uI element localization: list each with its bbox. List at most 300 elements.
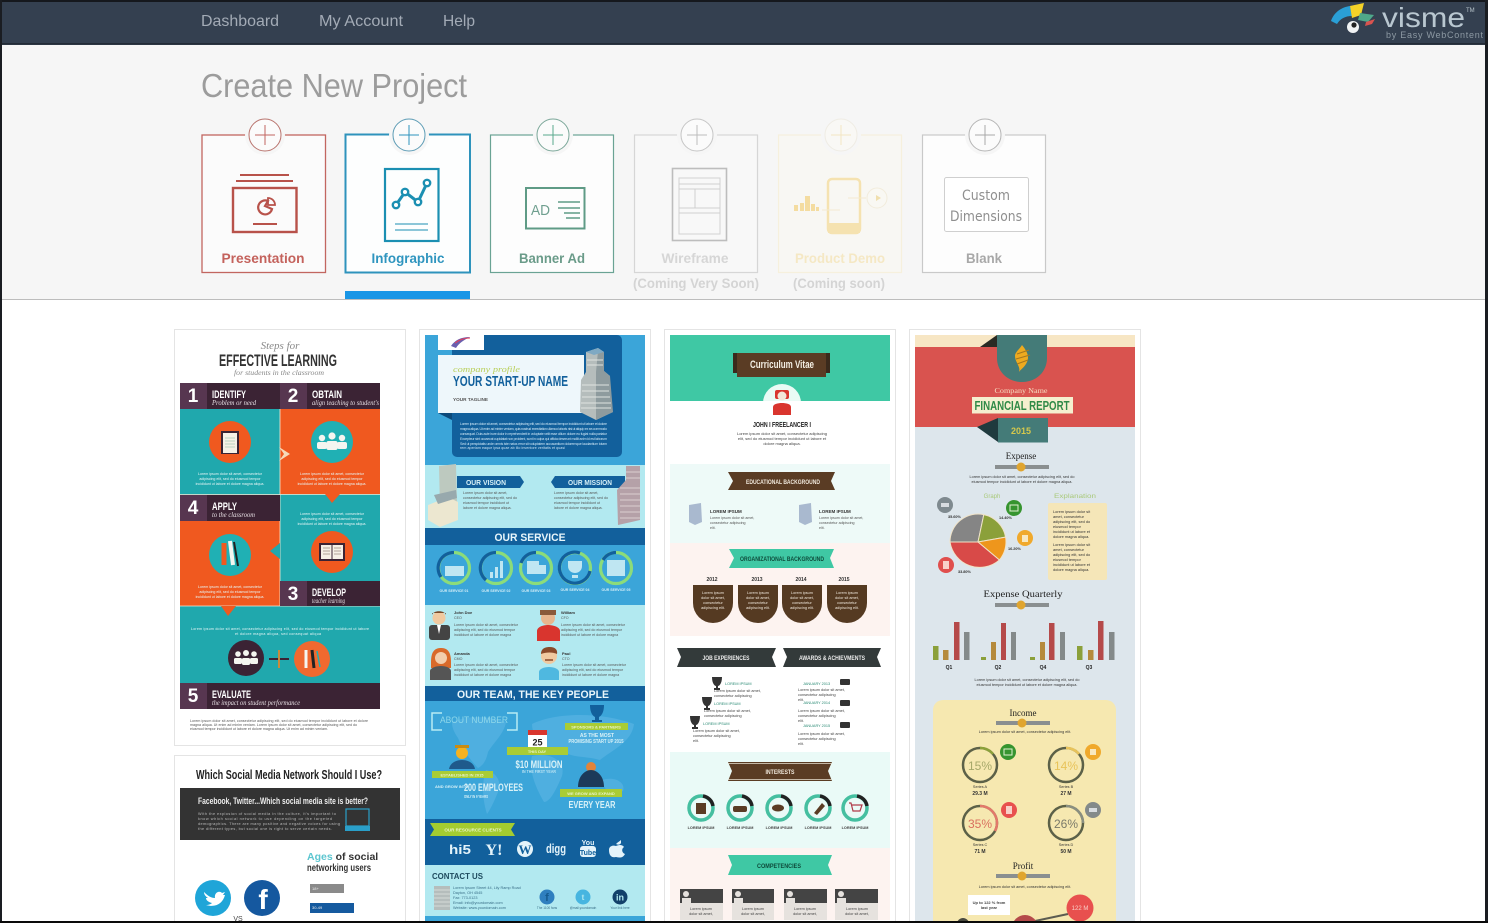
organizational background section: consectetur bbox=[792, 601, 813, 605]
income panel: 29.3 M bbox=[972, 791, 988, 797]
interests section: LOREM IPSUM bbox=[727, 826, 753, 830]
competencies section bbox=[670, 848, 890, 920]
step 3: develop: 3 bbox=[288, 584, 298, 605]
organizational background section: Lorem ipsum bbox=[836, 591, 858, 595]
step 5: evaluate: et dolore magna aliqua, sed consequat aliqua bbox=[235, 632, 321, 636]
vs label: VS bbox=[233, 916, 243, 923]
organizational background section: consectetur bbox=[837, 601, 858, 605]
ages of social networking users bbox=[307, 851, 378, 913]
step 5: evaluate: Lorem ipsum dolor sit amet, consectetur adipiscing elit, sed do eiusmod tempor incididunt ut labore bbox=[191, 627, 369, 631]
awards and achievements: elit. bbox=[798, 698, 804, 702]
expense quarterly bar chart: Expense Quarterly bbox=[984, 589, 1063, 599]
job experiences bbox=[677, 648, 776, 743]
job experiences: consectetur adipiscing bbox=[704, 714, 742, 718]
footer note: eiusmod tempor incididunt ut labore et dolore magna aliqua. Ut enim ad minim veniam. bbox=[190, 727, 328, 731]
social media intro banner: Facebook, Twitter...Which social media site is better? bbox=[198, 796, 368, 807]
intro text block: Sed ut perspiciatis unde omnis iste natus error sit voluptatem accusantium doloremque laudantium totam bbox=[460, 442, 607, 446]
explanation panel: dolore magna aliqua. bbox=[1053, 534, 1089, 539]
explanation panel: Lorem ipsum dolor sit bbox=[1053, 542, 1091, 547]
report header: Company Name bbox=[994, 387, 1048, 395]
interests section: LOREM IPSUM bbox=[688, 826, 714, 830]
stat: sponsors: PROMISING START UP 2015 bbox=[568, 739, 624, 745]
explanation panel: amet, consectetur bbox=[1053, 547, 1085, 552]
about number label bbox=[432, 713, 517, 730]
partner logos section: Y! bbox=[486, 842, 502, 859]
job experiences: LOREM IPSUM bbox=[714, 702, 741, 706]
person: John Doe: adipiscing elit, sed do eiusmod tempor bbox=[454, 628, 516, 632]
logo: visme bbox=[1331, 2, 1483, 40]
person: Paul: adipiscing elit, sed do eiusmod tempor bbox=[562, 668, 624, 672]
project type: Wireframe: (Coming Very Soon) bbox=[633, 275, 759, 291]
stat: ten million: IN THE FIRST YEAR bbox=[522, 769, 557, 774]
ages of social networking users: 18+ bbox=[312, 886, 319, 891]
income panel: Series D bbox=[1059, 843, 1074, 847]
our vision ribbon: labore et dolore magna aliqua. bbox=[463, 506, 512, 510]
stat: ten million bbox=[507, 730, 568, 774]
income rings bbox=[963, 748, 1083, 840]
stat: ten million: $10 MILLION bbox=[516, 759, 563, 771]
our mission ribbon: consectetur adipiscing elit, sed do bbox=[554, 496, 608, 500]
step 3: develop bbox=[280, 512, 380, 606]
stat: sponsors: SPONSORS & PARTNERS bbox=[571, 724, 621, 730]
educational background section: consectetur adipiscing bbox=[819, 521, 855, 525]
competencies section: dolor sit amet, bbox=[793, 912, 817, 916]
explanation panel: incididunt ut labore et bbox=[1053, 562, 1091, 567]
awards and achievements: JANUARY 2015 bbox=[803, 724, 830, 728]
step 4: apply: 4 bbox=[188, 498, 199, 519]
awards and achievements: consectetur adipiscing bbox=[798, 693, 836, 697]
income panel: 27 M bbox=[1060, 791, 1072, 797]
step 1: identify: IDENTIFY bbox=[212, 389, 246, 401]
step 2: obtain: incididunt ut labore et dolore magna aliqua. bbox=[298, 482, 366, 486]
interests section bbox=[670, 752, 890, 848]
income panel: 26% bbox=[1054, 817, 1078, 831]
organizational background section: Lorem ipsum bbox=[747, 591, 769, 595]
our vision ribbon: OUR VISION bbox=[466, 480, 506, 487]
organizational background section bbox=[670, 543, 890, 636]
custom dimensions box bbox=[944, 178, 1028, 232]
job experiences: JOB EXPERIENCES bbox=[702, 655, 750, 662]
job experiences: LOREM IPSUM bbox=[703, 722, 730, 726]
explanation panel: amet, consectetur bbox=[1053, 514, 1085, 519]
report header bbox=[915, 335, 1135, 442]
job experiences: Lorem ipsum dolor sit amet, bbox=[693, 729, 740, 733]
person: Amanda: incididunt ut labore et dolore magna bbox=[454, 673, 511, 677]
educational background section: Lorem ipsum dolor sit amet, bbox=[710, 516, 754, 520]
icon: ad banner bbox=[526, 188, 584, 228]
template card: Effective Learning bbox=[174, 330, 406, 746]
step 2: obtain: adipiscing elit, sed do eiusmod tempor bbox=[301, 477, 363, 481]
intro text block: rem aperiam eaque ipsa quae ab illo inventore veritatis et quasi bbox=[460, 446, 565, 450]
team members bbox=[425, 605, 645, 683]
expense quarterly bar chart: Lorem ipsum dolor sit amet, consectetur adipiscing elit, sed do bbox=[975, 678, 1079, 682]
step 3: develop: incididunt ut labore et dolore magna aliqua. bbox=[298, 522, 366, 526]
stat: 200 employees: AND GROW INTO bbox=[435, 784, 468, 789]
curriculum vitae ribbon: Curriculum Vitae bbox=[750, 359, 814, 371]
step 1: identify: Lorem ipsum dolor sit amet, consectetur bbox=[198, 472, 263, 476]
person: John Doe bbox=[429, 610, 519, 640]
competencies section: Lorem ipsum bbox=[794, 907, 816, 911]
income panel: 71 M bbox=[974, 849, 986, 855]
explanation panel: adipiscing elit, sed do bbox=[1053, 519, 1090, 524]
project type: Product Demo bbox=[778, 115, 902, 291]
competencies section: Lorem ipsum bbox=[690, 907, 712, 911]
explanation panel bbox=[1048, 494, 1107, 580]
template card: Company Profile bbox=[420, 330, 650, 923]
project type: Product Demo: (Coming soon) bbox=[793, 275, 885, 291]
expense pie chart: 35.60% bbox=[948, 515, 962, 519]
person: William: adipiscing elit, sed do eiusmod tempor bbox=[561, 628, 623, 632]
contact us section: Dayton, OH 4545 bbox=[453, 891, 482, 895]
contact us section: Website: www.yourdomain.com bbox=[453, 906, 506, 910]
job experiences: consectetur adipiscing bbox=[693, 734, 731, 738]
awards and achievements: Lorem ipsum dolor sit amet, bbox=[798, 709, 845, 713]
partner logos section: Tube bbox=[580, 850, 596, 857]
income panel: 50 M bbox=[1060, 849, 1072, 855]
organizational background section: dolor sit amet, bbox=[701, 596, 725, 600]
interests section: LOREM IPSUM bbox=[805, 826, 831, 830]
freelancer profile bbox=[737, 384, 827, 446]
explanation panel: eiusmod tempor bbox=[1053, 524, 1082, 529]
expense quarterly bar chart bbox=[933, 589, 1114, 687]
nav link: Dashboard: Dashboard bbox=[201, 13, 279, 30]
icon: facebook: f bbox=[258, 884, 268, 915]
our resource clients ribbon bbox=[430, 823, 515, 836]
person: William: CFO bbox=[561, 616, 569, 620]
profit callout: last year bbox=[981, 905, 998, 910]
competencies section: Lorem ipsum bbox=[846, 907, 868, 911]
partner logos section: You bbox=[582, 840, 594, 847]
interests section: LOREM IPSUM bbox=[766, 826, 792, 830]
illustration: world map bbox=[452, 715, 634, 814]
nav link: My Account: My Account bbox=[319, 13, 404, 30]
logo: visme: visme bbox=[1382, 2, 1465, 33]
person: John Doe: incididunt ut labore et dolore magna bbox=[454, 633, 511, 637]
our resource clients ribbon: OUR RESOURCE CLIENTS bbox=[444, 828, 502, 832]
explanation panel: incididunt ut labore et bbox=[1053, 529, 1091, 534]
contact us section: @mail.yourdomain bbox=[570, 906, 597, 910]
title block: YOUR TAGLINE bbox=[453, 397, 488, 402]
organizational background section: 2015 bbox=[838, 577, 850, 583]
income heading: Lorem ipsum dolor sit amet, consectetur adipiscing elit. bbox=[979, 730, 1071, 734]
explanation panel: eiusmod tempor bbox=[1053, 557, 1082, 562]
project type: Banner Ad: Banner Ad bbox=[519, 250, 585, 266]
expense quarterly bar chart: Q4 bbox=[1040, 665, 1047, 671]
awards and achievements: Lorem ipsum dolor sit amet, bbox=[798, 688, 845, 692]
step 4: apply: adipiscing elit, sed do eiusmod tempor bbox=[199, 590, 261, 594]
step 4: apply: to the classroom bbox=[212, 511, 255, 519]
social media intro banner: With the explosion of social media in the culture, it's important to bbox=[198, 812, 336, 816]
profit heading bbox=[979, 861, 1071, 889]
stat: every year bbox=[560, 762, 622, 811]
our mission ribbon: eiusmod tempor incididunt ut bbox=[554, 501, 600, 505]
about number label: ABOUT NUMBER bbox=[440, 715, 508, 725]
intro text block: magna aliqua. Ut enim ad minim veniam, quis nostrud exercitation ullamco laboris nisi ut aliquip ex ea commodo bbox=[460, 427, 607, 431]
social media intro banner: the different types, but social one is right to serve certain needs. bbox=[198, 827, 332, 831]
organizational background section: dolor sit amet, bbox=[790, 596, 814, 600]
educational background section: EDUCATIONAL BACKGROUND bbox=[746, 479, 820, 486]
expense pie chart: 33.80% bbox=[958, 570, 972, 574]
year tag bbox=[977, 418, 1048, 442]
awards and achievements: JANUARY 2014 bbox=[803, 701, 830, 705]
step 4: apply bbox=[180, 495, 280, 599]
step 3: develop: adipiscing elit, sed do eiusmod tempor bbox=[301, 517, 363, 521]
awards and achievements bbox=[783, 648, 881, 746]
step 4: apply: incididunt ut labore et dolore magna aliqua. bbox=[196, 595, 264, 599]
educational background section: LOREM IPSUM bbox=[819, 509, 851, 514]
project type: Infographic (selected) bbox=[346, 115, 470, 272]
freelancer profile: elit, sed do eiusmod tempor incididunt ut labore et bbox=[738, 436, 827, 441]
footer note: magna aliqua. Ut enim ad minim veniam. Lorem ipsum dolor sit amet, consectetur adipiscing elit, sed do bbox=[190, 723, 357, 727]
icon: phone with bars and play bbox=[794, 179, 887, 233]
step 3: develop: Lorem ipsum dolor sit amet, consectetur bbox=[300, 512, 365, 516]
our service section: OUR SERVICE 02 bbox=[482, 589, 511, 593]
expense heading: Expense bbox=[1006, 451, 1036, 461]
person: Paul bbox=[539, 647, 627, 680]
partner logos section: W bbox=[518, 842, 532, 857]
step 3: develop: DEVELOP bbox=[312, 587, 346, 599]
vision and mission band bbox=[425, 464, 645, 528]
step 4: apply: APPLY bbox=[212, 501, 237, 513]
step 1: identify: 1 bbox=[188, 386, 199, 407]
page title: Create New Project bbox=[201, 67, 467, 104]
our service section: OUR SERVICE 01 bbox=[440, 589, 469, 593]
job experiences: Lorem ipsum dolor sit amet, bbox=[714, 689, 761, 693]
footer note bbox=[190, 719, 368, 731]
organizational background section: adipiscing elit. bbox=[790, 606, 814, 610]
competencies section: dolor sit amet, bbox=[845, 912, 869, 916]
organizational background section: Lorem ipsum bbox=[702, 591, 724, 595]
educational background section bbox=[670, 464, 890, 543]
project type: Banner Ad bbox=[490, 115, 614, 272]
our service section: OUR SERVICE 03 bbox=[522, 589, 551, 593]
contact us section: t bbox=[582, 893, 585, 902]
stat: 200 employees bbox=[432, 745, 523, 799]
person: Amanda: Lorem ipsum dolor sit amet, consectetur bbox=[454, 663, 519, 667]
step 2: obtain: align teaching to student's bbox=[312, 399, 379, 407]
custom dimensions box: Dimensions bbox=[950, 209, 1022, 225]
profit callout: Up to 122 % from bbox=[973, 900, 1006, 905]
profit heading: Lorem ipsum dolor sit amet, consectetur adipiscing elit. bbox=[979, 885, 1071, 889]
intro text block: consequat. Duis aute irure dolor in reprehenderit in voluptate velit esse cillum dolore eu fugiat nulla pariatur bbox=[460, 432, 608, 436]
organizational background section: consectetur bbox=[748, 601, 769, 605]
person: Amanda: adipiscing elit, sed do eiusmod tempor bbox=[454, 668, 516, 672]
stat: every year: EVERY YEAR bbox=[568, 799, 616, 811]
project type: Presentation: Presentation bbox=[222, 250, 304, 266]
stat: every year: WE GROW AND EXPAND bbox=[567, 791, 615, 796]
contact us section: The 1100 fans bbox=[537, 906, 557, 910]
template heading: EFFECTIVE LEARNING bbox=[219, 351, 337, 370]
profit callout: 122 M bbox=[1072, 906, 1088, 912]
explanation panel: dolore magna aliqua. bbox=[1053, 567, 1089, 572]
person: Paul: CTO bbox=[562, 657, 570, 661]
project type: Blank bbox=[922, 115, 1046, 272]
illustration: right building bbox=[617, 466, 640, 525]
expense quarterly bar chart: Q3 bbox=[1086, 665, 1093, 671]
expense quarterly bar chart: eiusmod tempor incididunt ut labore et dolore magna aliqua. bbox=[977, 683, 1077, 687]
person: William: incididunt ut labore et dolore magna bbox=[561, 633, 618, 637]
our mission ribbon bbox=[551, 476, 625, 510]
intro text block: Excepteur sint occaecat cupidatat non proident, sunt in culpa qui officia deserunt mollit anim id est laborum bbox=[460, 437, 607, 441]
project type: Wireframe bbox=[633, 115, 759, 291]
organizational background section: dolor sit amet, bbox=[746, 596, 770, 600]
educational background section: Lorem ipsum dolor sit amet, bbox=[819, 516, 863, 520]
profit heading: Profit bbox=[1013, 861, 1034, 871]
logo tab bbox=[438, 335, 484, 350]
our service section bbox=[425, 528, 645, 605]
partner logos section: digg bbox=[546, 841, 566, 856]
intro text block: Lorem ipsum dolor sit amet, consectetur adipiscing elit, sed do eiusmod tempor incididunt ut labore et dolore bbox=[460, 422, 607, 426]
income panel: Series A bbox=[973, 785, 988, 789]
freelancer profile: Lorem ipsum dolor sit amet, consectetur adipiscing bbox=[737, 431, 827, 436]
interests section: LOREM IPSUM bbox=[842, 826, 868, 830]
awards and achievements: elit. bbox=[798, 742, 804, 746]
step 1: identify: adipiscing elit, sed do eiusmod tempor bbox=[199, 477, 261, 481]
template card: Financial Report bbox=[910, 330, 1140, 923]
our service section: OUR SERVICE 04 bbox=[561, 588, 590, 592]
organizational background section: 2014 bbox=[795, 577, 807, 583]
step 4: apply: Lorem ipsum dolor sit amet, consectetur bbox=[198, 585, 263, 589]
organizational background section: adipiscing elit. bbox=[746, 606, 770, 610]
our vision ribbon: eiusmod tempor incididunt ut bbox=[463, 501, 509, 505]
title block: company profile bbox=[453, 365, 521, 374]
contact us section: Email: info@yourdomain.com bbox=[453, 901, 503, 905]
ages of social networking users: networking users bbox=[307, 862, 371, 874]
curriculum vitae ribbon bbox=[733, 353, 830, 377]
explanation panel: Lorem ipsum dolor sit bbox=[1053, 509, 1091, 514]
contact us section: in bbox=[616, 892, 624, 902]
logo: visme: TM bbox=[1466, 8, 1475, 14]
financial report plate: FINANCIAL REPORT bbox=[974, 398, 1070, 413]
illustration: left buildings bbox=[428, 464, 458, 527]
organizational background section: dolor sit amet, bbox=[835, 596, 859, 600]
step 1: identify bbox=[180, 383, 280, 486]
freelancer profile: dolore magna aliqua. bbox=[763, 441, 801, 446]
person: Paul: Paul bbox=[562, 651, 570, 656]
income panel: Series C bbox=[973, 843, 988, 847]
income panel: Series B bbox=[1059, 785, 1074, 789]
contact us section bbox=[425, 865, 645, 921]
icon: facebook bbox=[244, 880, 280, 916]
explanation panel: Explanation bbox=[1054, 494, 1096, 500]
project type: Product Demo: Product Demo bbox=[795, 250, 885, 266]
organizational background section: 2012 bbox=[706, 577, 718, 583]
organizational background section: ORGANIZATIONAL BACKGROUND bbox=[740, 556, 824, 563]
profit callout bbox=[957, 894, 1094, 923]
title block: YOUR START-UP NAME bbox=[453, 373, 568, 390]
step 1: identify: incididunt ut labore et dolore magna aliqua. bbox=[196, 482, 264, 486]
template heading: for students in the classroom bbox=[234, 368, 325, 377]
partner logos section bbox=[425, 819, 645, 865]
illustration: tower bbox=[580, 348, 613, 420]
project type: Wireframe: Wireframe bbox=[662, 250, 729, 266]
step 5: evaluate bbox=[180, 627, 380, 709]
company shield bbox=[997, 335, 1047, 382]
person: Amanda: Amanda bbox=[454, 651, 471, 656]
custom dimensions box: Custom bbox=[962, 188, 1010, 204]
template card: Curriculum Vitae bbox=[664, 330, 896, 923]
logo: visme: by Easy WebContent bbox=[1386, 30, 1483, 40]
our service section: OUR SERVICE 05 bbox=[602, 588, 631, 592]
person: Paul: incididunt ut labore et dolore magna bbox=[562, 673, 619, 677]
contact us section: Fax: 773-0123 bbox=[453, 896, 478, 900]
expense pie chart bbox=[937, 494, 1033, 574]
explanation panel: adipiscing elit, sed do bbox=[1053, 552, 1090, 557]
expense pie chart: 16.20% bbox=[1008, 547, 1022, 551]
educational background section: elit. bbox=[710, 526, 716, 530]
footer note: Lorem ipsum dolor sit amet, consectetur adipiscing elit, sed do eiusmod tempor incididunt ut labore et dolore bbox=[190, 719, 368, 723]
job experiences: consectetur adipiscing bbox=[714, 694, 752, 698]
step 5: evaluate: the impact on student performance bbox=[212, 699, 300, 707]
expense quarterly bar chart: Q2 bbox=[995, 665, 1002, 671]
person: William: Lorem ipsum dolor sit amet, consectetur bbox=[561, 623, 626, 627]
organizational background section: adipiscing elit. bbox=[701, 606, 725, 610]
step 2: obtain bbox=[280, 383, 380, 486]
partner logos section: hi5 bbox=[449, 842, 471, 857]
person: Paul: Lorem ipsum dolor sit amet, consectetur bbox=[562, 663, 627, 667]
educational background section: consectetur adipiscing bbox=[710, 521, 746, 525]
interests section: INTERESTS bbox=[766, 769, 795, 776]
expense pie chart: Graph bbox=[984, 494, 1000, 500]
person: William: William bbox=[561, 610, 575, 615]
awards and achievements: consectetur adipiscing bbox=[798, 737, 836, 741]
income panel bbox=[933, 700, 1116, 923]
template heading bbox=[219, 340, 337, 377]
project type: Blank: Blank bbox=[966, 250, 1002, 266]
nav link: Help: Help bbox=[443, 13, 475, 30]
expense heading: Lorem ipsum dolor sit amet, consectetur adipiscing elit, sed do bbox=[970, 475, 1074, 479]
our team heading bbox=[425, 683, 645, 701]
our vision ribbon: Lorem ipsum dolor sit amet, bbox=[463, 491, 507, 495]
stat: 200 employees: ESTABLISHED IN 2015 bbox=[440, 772, 484, 778]
educational background section: elit. bbox=[819, 526, 825, 530]
awards and achievements: AWARDS & ACHIEVMENTS bbox=[799, 655, 866, 662]
job experiences: LOREM IPSUM bbox=[725, 682, 752, 686]
pie bubbles bbox=[937, 497, 1033, 573]
contact us section: CONTACT US bbox=[432, 872, 484, 881]
social media intro banner bbox=[180, 788, 400, 840]
person: John Doe: CEO bbox=[454, 616, 462, 620]
icon: line chart page bbox=[385, 169, 438, 241]
stat: sponsors bbox=[565, 705, 628, 745]
icon: presentation screen bbox=[233, 175, 296, 232]
expense pie chart: 14.40% bbox=[999, 516, 1013, 520]
organizational background section: adipiscing elit. bbox=[835, 606, 859, 610]
about number section bbox=[425, 701, 645, 819]
awards and achievements: JANUARY 2013 bbox=[803, 682, 830, 686]
top navigation bar bbox=[0, 0, 1488, 45]
step 2: obtain: OBTAIN bbox=[312, 389, 342, 401]
icon: wireframe page bbox=[672, 168, 726, 240]
template heading: Steps for bbox=[261, 340, 300, 352]
our mission ribbon: OUR MISSION bbox=[568, 480, 612, 487]
organizational background section: consectetur bbox=[703, 601, 724, 605]
step 1: identify: Problem or need bbox=[211, 399, 256, 407]
our service section: OUR SERVICE bbox=[494, 532, 566, 544]
awards and achievements: elit. bbox=[798, 719, 804, 723]
income panel: 15% bbox=[968, 759, 992, 773]
social media heading: Which Social Media Network Should I Use? bbox=[196, 767, 382, 782]
income panel: 35% bbox=[968, 817, 992, 831]
awards and achievements: Lorem ipsum dolor sit amet, bbox=[798, 732, 845, 736]
competencies section: Lorem ipsum bbox=[742, 907, 764, 911]
contact us section: Your link here bbox=[610, 906, 630, 910]
stat: 200 employees: ONLY IN 9 YEARS bbox=[464, 794, 488, 799]
our team heading: OUR TEAM, THE KEY PEOPLE bbox=[457, 689, 609, 701]
step 2: obtain: Lorem ipsum dolor sit amet, consectetur bbox=[300, 472, 365, 476]
ages of social networking users: 30-49 bbox=[312, 905, 323, 910]
contact us section: f bbox=[545, 892, 549, 904]
